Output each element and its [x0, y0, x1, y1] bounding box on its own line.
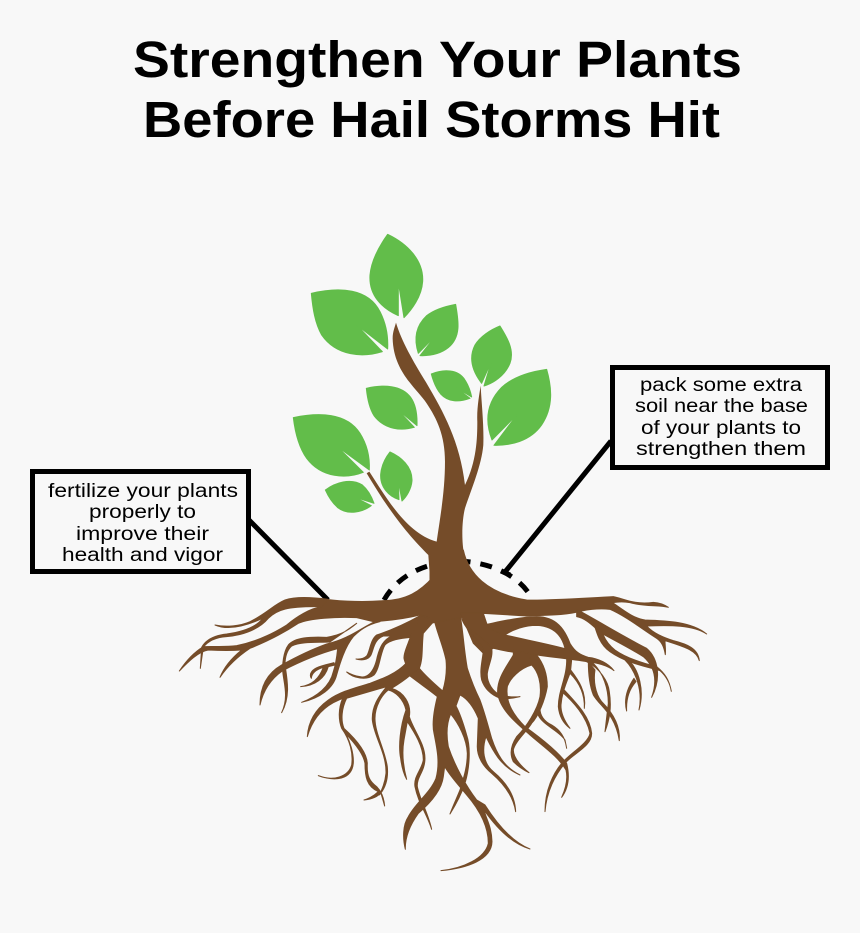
title — [133, 31, 742, 148]
callout: fertilize: improve their — [76, 524, 210, 545]
dashed soil mound arc — [384, 561, 533, 600]
callout: extra soil: strengthen them — [636, 439, 806, 460]
connector line: right callout — [501, 441, 611, 575]
callout: fertilize: health and vigor — [62, 545, 224, 566]
callout: fertilize: fertilize your plants — [48, 481, 238, 502]
title: Strengthen Your Plants — [133, 31, 742, 88]
center roots — [404, 607, 530, 871]
title: Before Hail Storms Hit — [143, 91, 720, 148]
right roots — [430, 550, 707, 812]
callout: extra soil: pack some extra — [640, 375, 802, 396]
roots — [179, 550, 707, 871]
callout: fertilize: properly to — [89, 502, 196, 523]
callout: extra soil: soil near the base — [635, 396, 808, 417]
connector line: left callout — [249, 520, 328, 600]
callout: fertilize — [32, 472, 248, 572]
callout: extra soil: of your plants to — [641, 418, 801, 439]
tree leaves — [293, 234, 551, 512]
tree trunk — [367, 323, 483, 578]
left roots — [179, 577, 453, 829]
callout: extra soil — [612, 368, 828, 468]
